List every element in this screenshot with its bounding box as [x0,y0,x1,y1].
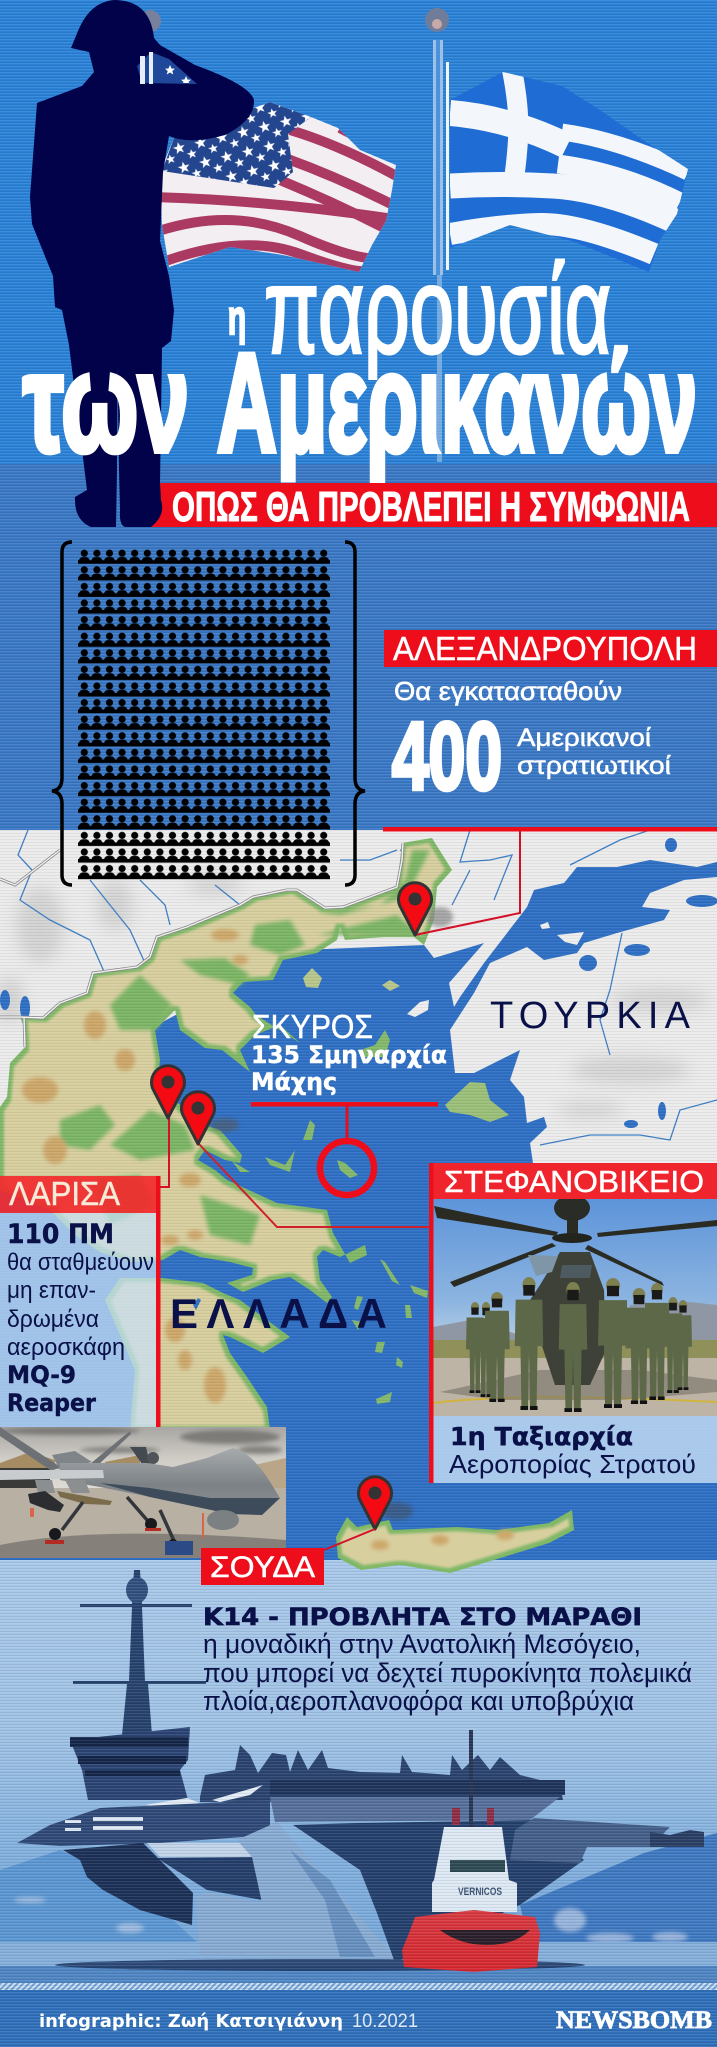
crew member 1 [466,1302,484,1393]
caption background [433,1416,717,1483]
aircraft carrier [17,1570,704,1972]
rule [383,827,717,832]
rotor blades [434,1206,717,1287]
title [23,243,697,481]
right hull [293,1820,584,1960]
right sponson [510,1818,670,1863]
marker poles [30,1508,204,1538]
soldier silhouette [30,0,254,527]
grass [434,1340,717,1358]
under deck dark [157,1857,262,1900]
crew member 2 [477,1302,495,1397]
munitions [28,1491,64,1512]
tarmac [433,1358,717,1417]
water shadow [55,1959,585,1971]
tug mast [469,1730,473,1830]
mountain snow [14,1897,688,1943]
flag seen through saluting arm [137,52,197,84]
credits: 10.2021 [352,2011,418,2032]
souda text block [203,1603,692,1716]
ring [320,1141,374,1195]
rotor head [554,1199,590,1220]
model name: Reaper [7,1389,96,1417]
crete [336,1510,574,1573]
flag pole left [139,10,161,70]
pin: larissa [152,1066,184,1118]
crew member 8 [626,1288,652,1404]
country label: Greece: ΕΛΛΑΔΑ [170,1290,387,1337]
crew member 3 [484,1292,510,1402]
intro text: Θα εγκατασταθούν [394,676,622,706]
tug fender [440,1930,530,1945]
right arm [650,1830,704,1847]
land: northern Balkans [0,830,717,1107]
helicopter body [530,1252,606,1385]
connector [415,830,520,935]
connector [198,1143,430,1227]
unit: 135 Σμηναρχία [251,1041,447,1069]
island tower [70,1727,190,1800]
souda label [201,1529,375,1585]
credits: infographic: Ζωή Κατσιγιάννη [39,2011,343,2032]
model name: MQ-9 [7,1361,76,1389]
deck crowd [270,1780,565,1795]
drone fuselage [60,1448,280,1515]
white aircraft wings [145,1785,263,1808]
hangars [0,1452,55,1470]
mountains [433,1302,717,1343]
panel background [0,1213,156,1427]
label text: ΑΛΕΞΑΝΔΡΟΥΠΟΛΗ [393,630,697,667]
bomb [57,1491,112,1505]
connector [160,1118,169,1187]
sea [0,830,717,1562]
title: των [23,324,189,481]
crew member 5 [559,1282,587,1412]
description: Αμερικανοί [517,724,651,752]
left mountains [0,1850,200,1945]
cockpit [528,1255,558,1276]
land: Turkey [450,877,717,1170]
crew member 4 [515,1277,543,1410]
heading: 110 ΠΜ [7,1219,114,1250]
bottom panel [0,1560,717,2047]
tug nameplate: VERNICOS [458,1886,502,1898]
canton [162,102,311,188]
side rule [156,1176,160,1428]
country label: Turkey: ΤΟΥΡΚΙΑ [490,995,691,1037]
description: θα σταθμεύουν [7,1249,154,1276]
rule [251,1102,438,1106]
number: 400 [392,703,502,810]
flag white cross and stripes [450,70,688,254]
pin shadow [211,1118,239,1132]
alexandroupoli block [383,630,717,935]
label text: ΣΤΕΦΑΝΟΒΙΚΕΙΟ [444,1164,704,1199]
stefanovikeio panel [198,1143,717,1483]
near water [0,1966,717,1984]
islands north aegean white [407,922,584,1017]
crew member 6 [598,1278,628,1408]
larissa lake [193,1298,201,1310]
wheels [49,1518,177,1541]
panel texture [0,1560,717,2047]
greek border highlight [0,843,403,1047]
lowland greens [60,850,430,1245]
rivers [18,830,717,1145]
antenna [130,1447,150,1464]
caption text: Αεροπορίας Στρατού [449,1449,696,1479]
tug windows [450,1860,505,1872]
relief shading [0,875,710,1118]
tug red flags [452,1808,494,1825]
label [0,1176,158,1213]
right mountains [520,1833,717,1947]
unit second line: Μάχης [251,1068,337,1096]
left brace [52,542,72,885]
lakes [0,838,717,1128]
texture overlay [0,0,717,830]
american flag [161,102,396,272]
larissa panel [0,1118,169,1428]
crew member 9 [663,1297,683,1393]
canton stars [162,102,311,188]
title: η [228,292,246,345]
side platform [17,1800,270,1846]
newsbomb logo: NEWSBOMB [556,2007,712,2034]
lifeboat rows [65,1817,143,1831]
model name [7,1361,96,1417]
map of Greece and Turkey [0,830,717,1562]
tug superstructure [432,1827,517,1912]
alexandroupoli pin shadow [427,907,453,927]
pin: alexandroupoli [398,883,432,935]
side rule [429,1163,434,1483]
connector [346,1104,348,1140]
description: στρατιωτικοί [517,752,671,780]
tower decks [70,1737,188,1776]
pale wall [147,1843,252,1857]
shadow [440,1370,717,1400]
bow [196,1822,395,1958]
pale water [0,1942,717,1968]
crew member 7 [644,1283,670,1400]
pin: souda [358,1477,392,1529]
description: δρωμένα [7,1306,99,1333]
description: αεροσκάφη [7,1334,125,1361]
under sponson [63,1843,193,1925]
label text: ΛΑΡΙΣΑ [9,1175,120,1212]
blue tow block [165,1541,193,1555]
greek flag [450,72,688,272]
background bands [0,0,717,830]
crew [466,1277,692,1412]
tail fins [0,1427,131,1470]
souda text block: η μοναδική στην Ανατολική Μεσόγειο, [203,1629,641,1659]
clouds [0,1427,282,1454]
footer band [0,1990,717,2047]
yellow line [433,1397,717,1403]
heading: ΣΚΥΡΟΣ [252,1008,373,1045]
souda text block: Κ14 - ΠΡΟΒΛΗΤΑ ΣΤΟ ΜΑΡΑΘΙ [203,1603,642,1631]
chocks [45,1528,161,1544]
land interior tint [0,838,452,1430]
right brace [345,542,365,885]
skyros callout [251,1008,447,1195]
pylons [35,1480,90,1493]
mast radome [126,1577,148,1603]
tug hull [402,1910,540,1972]
panel background [0,1560,717,1984]
separator strip [0,1983,717,1990]
peloponnese [105,1278,290,1430]
greek flag pole [425,8,449,462]
mast [73,1570,206,1735]
label [430,1163,717,1199]
aircraft on deck [200,1745,563,1802]
bow shadow band [290,1850,375,1957]
drone underside [100,1483,280,1515]
landing gear [62,1497,175,1543]
photo [433,1195,717,1417]
sensor dome [147,1452,159,1464]
red stripes [150,128,400,271]
greek border [0,843,403,1047]
pin: stefanovikeio [182,1092,214,1144]
deck wall [270,1797,560,1822]
greek mainland [0,838,452,1303]
souda label: ΣΟΥΔΑ [210,1551,315,1584]
description [517,724,671,780]
mountain browns [22,929,248,1403]
sea texture [0,830,717,1560]
description: μη επαν- [7,1277,96,1304]
tarmac [0,1488,286,1545]
caption heading: 1η Ταξιαρχία [450,1422,633,1451]
souda pin shadow [381,1502,413,1520]
wing [0,1470,104,1480]
400 soldiers pictogram [52,542,365,885]
tail cone [52,1451,92,1470]
souda text block: που μπορεί να δεχτεί πυροκίνητα πολεμικά [203,1658,692,1688]
label [384,630,717,667]
crew member 10 [674,1300,692,1390]
drone photo [0,1427,286,1558]
crete highlands [371,1530,514,1550]
description [7,1249,154,1361]
islands [232,968,509,1404]
souda text block: πλοία,αεροπλανοφόρα και υποβρύχια [203,1686,634,1716]
sensor ball [207,1510,239,1530]
